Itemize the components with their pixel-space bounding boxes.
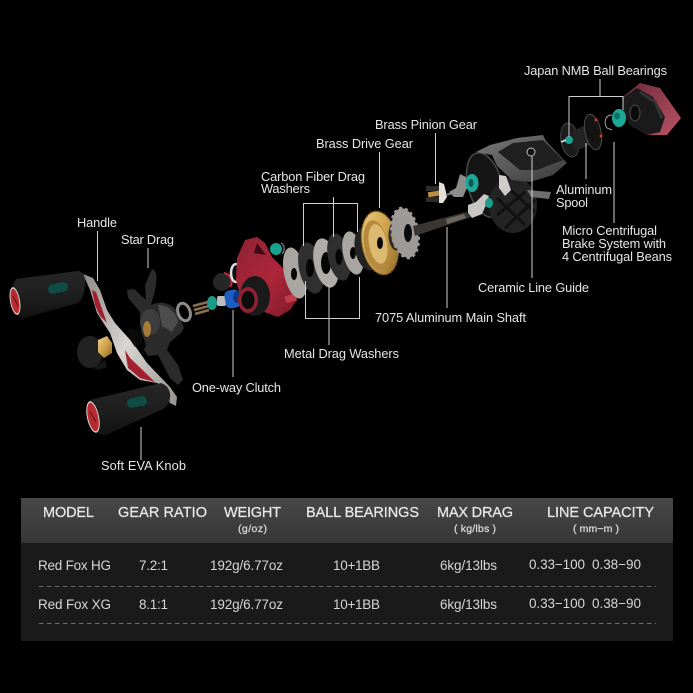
callout: Carbon Fiber Drag Washers: Washers [261,181,310,196]
row: Red Fox XG: 0.38−90 [592,596,641,611]
callout: Japan NMB Ball Bearings [524,63,667,137]
ratchet gear with washer [388,206,422,260]
callout: Handle: Handle [77,215,117,230]
callout: Aluminum Spool [556,143,612,210]
lower knob [84,383,170,435]
silver drag washer 3 [339,229,367,277]
callout: Brass Drive Gear [316,136,414,208]
main gear plate and teal bearing [449,174,478,197]
callout: Ceramic Line Guide: Ceramic Line Guide [478,280,589,295]
callout: Carbon Fiber Drag Washers [261,169,365,246]
table header row: MODEL [43,505,94,521]
callout: Brass Pinion Gear: Brass Pinion Gear [375,117,478,132]
row: Red Fox XG: Red Fox XG [38,597,111,612]
row: Red Fox XG: 6kg/13lbs [440,597,497,612]
silver drag washer 1 [279,245,311,301]
callout: Micro Centrifugal Brake System: Micro Centrifugal [562,223,657,238]
row: Red Fox HG [38,557,641,573]
callout: Star Drag [121,232,174,268]
teal spool bearing [612,109,626,127]
row: Red Fox HG: 6kg/13lbs [440,558,497,573]
black gear washer [351,225,383,273]
callout: Ceramic Line Guide [478,156,589,295]
table header row [21,498,673,543]
handle arm [83,274,177,406]
callout: Soft EVA Knob: Soft EVA Knob [101,458,186,473]
callout: 7075 Aluminum Main Shaft: 7075 Aluminum Main Shaft [375,310,526,325]
row: Red Fox HG: Red Fox HG [38,558,111,573]
star drag [127,269,184,385]
row: Red Fox XG: 0.33−100 [529,596,585,611]
row: Red Fox XG [38,596,641,612]
callout: Micro Centrifugal Brake System: Brake System with [562,236,666,251]
handle nut and cap [77,336,112,370]
red-ringed cap and white ring [213,264,241,291]
callout: Metal Drag Washers: Metal Drag Washers [284,346,399,361]
callout: One-way Clutch [192,310,281,395]
callout: Micro Centrifugal Brake System [562,142,672,264]
aluminum spool [558,113,605,158]
table header row: MAX DRAG [437,505,513,521]
upper knob [8,271,85,318]
red side housing [236,237,297,317]
callout: Carbon Fiber Drag Washers: Carbon Fiber Drag [261,169,365,184]
callout: Aluminum Spool: Spool [556,195,588,210]
table header row: ( kg/lbs ) [454,523,496,535]
blue one-way clutch [224,289,241,309]
row: Red Fox HG: 10+1BB [333,558,380,573]
callout: Metal Drag Washers [284,277,399,361]
carbon drag washer 2 [323,231,355,283]
row: Red Fox XG: 192g/6.77oz [210,597,283,612]
reel main frame [460,135,567,233]
row: Red Fox HG: 192g/6.77oz [210,558,283,573]
callout: Brass Pinion Gear [375,117,478,184]
brass pinion gear [426,182,456,203]
row: Red Fox HG: 0.38−90 [592,557,641,572]
row: Red Fox HG: 7.2:1 [139,558,168,573]
callout: Soft EVA Knob [101,427,186,473]
silver drag washer 2 [309,236,343,290]
callout: Micro Centrifugal Brake System: 4 Centrifugal Beans [562,249,672,264]
teal bearing on housing [270,243,284,255]
table header row: WEIGHT [224,505,281,521]
table header row: BALL BEARINGS [306,505,419,521]
exploded reel diagram [8,63,681,473]
clutch stack: ring, spring, teal bearing [175,296,226,323]
table header row: LINE CAPACITY [547,505,654,521]
brass drive gear [357,208,403,278]
row: Red Fox HG: 0.33−100 [529,557,585,572]
table header row: (g/oz) [238,523,267,535]
row: Red Fox XG: 8.1:1 [139,597,168,612]
table header row: ( mm−m ) [573,523,619,535]
side cover with brake system [623,83,681,135]
specification table [21,498,673,641]
carbon drag washer 1 [294,240,328,296]
main shaft [413,212,471,236]
table header row: GEAR RATIO [118,505,207,521]
callout: Handle [77,215,117,281]
callout: Brass Drive Gear: Brass Drive Gear [316,136,414,151]
table body panel [21,498,673,641]
callout: One-way Clutch: One-way Clutch [192,380,281,395]
callout: Japan NMB Ball Bearings: Japan NMB Ball Bearings [524,63,667,78]
row: Red Fox XG: 10+1BB [333,597,380,612]
plate with teal bearing [468,194,493,218]
callout: Aluminum Spool: Aluminum [556,182,612,197]
callout: Star Drag: Star Drag [121,232,174,247]
brake clip [605,115,612,130]
